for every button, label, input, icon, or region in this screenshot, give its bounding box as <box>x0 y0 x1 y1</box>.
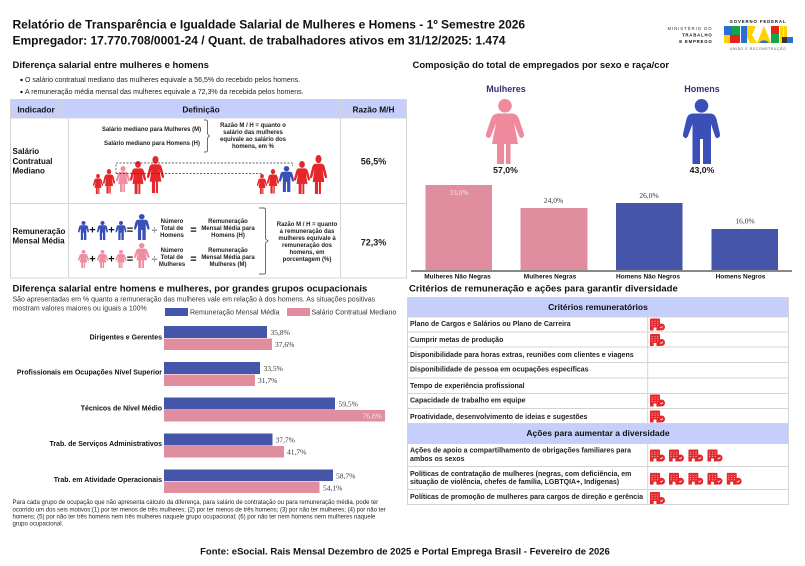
bar chart: sexo e raça/cor: Mulheres Não Negras <box>424 274 491 280</box>
icons: criteria <box>650 318 665 422</box>
bars: atividade operacionais: 54,1% <box>323 484 342 492</box>
formula: homens: ÷ <box>151 224 158 236</box>
logo: ministério do trabalho e emprego: MINISTÉRIO DO <box>667 26 712 31</box>
bullet text block: A remuneração média mensal das mulheres equivale a 72,3% da recebida pelos homens. <box>25 89 304 96</box>
definition: salário mediano: homens, em % <box>232 144 275 150</box>
icons: actions <box>650 450 742 504</box>
formula: mulheres <box>78 243 255 268</box>
header: critérios remuneratórios <box>408 298 788 317</box>
bars: atividade operacionais <box>54 470 355 493</box>
definition: razão remuneração: homens, em <box>289 250 325 256</box>
indicator: salário contratual mediano <box>12 147 52 176</box>
footnote: homens; (5) por não ter três homens nem três mulheres naquele grupo ocupacional; (6) por não ter nem homens nem mulheres naquele <box>12 514 376 520</box>
icon: mulheres 57,0%: 57,0% <box>493 165 518 175</box>
logo: ministério do trabalho e emprego: E EMPREGO <box>679 39 712 44</box>
criteria list: Plano de Cargos e Salários ou Plano de Carreira <box>410 321 571 328</box>
definition: salário mediano: equivale ao salário dos <box>220 137 287 143</box>
definition: razão remuneração: Razão M / H = quanto <box>277 222 338 228</box>
panel: critérios e ações <box>408 298 788 504</box>
bar chart: sexo e raça/cor: 24,0% <box>544 196 563 205</box>
bar chart: sexo e raça/cor <box>411 185 792 280</box>
criteria list: Proatividade, desenvolvimento de ideias e sugestões <box>410 414 588 421</box>
icon: mulheres 57,0%: Mulheres <box>486 84 526 94</box>
bar chart: sexo e raça/cor: Homens Não Negros <box>616 274 680 280</box>
logo: ministério do trabalho e emprego: TRABALHO <box>682 32 712 37</box>
formula: homens: = <box>127 224 133 236</box>
criteria list <box>410 321 634 421</box>
footnote: Para cada grupo de ocupação que não apresenta cálculo da diferença, para salário de contratação ou para remuneração média, pode ter <box>12 500 378 506</box>
criteria list: Tempo de experiência profissional <box>410 383 525 390</box>
indicator: remuneração mensal média: Mensal Média <box>12 236 65 246</box>
actions list: Ações de apoio a compartilhamento de obrigações familiares para <box>410 448 631 454</box>
legend: Salário Contratual Mediano <box>312 310 396 316</box>
title <box>12 17 525 47</box>
bars: técnicos: 76,8% <box>363 412 382 420</box>
subtitle text <box>12 296 376 312</box>
bars: profissionais: Profissionais em Ocupações Nível Superior <box>17 370 162 376</box>
header: ações para aumentar a diversidade <box>408 424 788 444</box>
formula: mulheres: + <box>108 254 115 266</box>
formula: mulheres: Total de <box>161 255 184 261</box>
bars: serviços administrativos: Trab. de Serviços Administrativos <box>49 441 162 448</box>
icon: homens 43,0%: 43,0% <box>690 165 715 175</box>
formula: homens: Remuneração <box>208 219 248 225</box>
definition: razão remuneração: porcentagem (%) <box>283 257 331 263</box>
formula: homens: Total de <box>161 226 184 232</box>
formula: mulheres: + <box>89 254 96 266</box>
indicator: salário contratual mediano: Salário <box>12 147 39 156</box>
bullet text block <box>20 77 304 96</box>
value: 56,5%: 56,5% <box>361 156 386 166</box>
header: critérios remuneratórios: Critérios remuneratórios <box>548 302 648 312</box>
bullet text block: O salário contratual mediano das mulheres equivale a 56,5% do recebido pelos homens. <box>25 77 300 84</box>
formula: homens: + <box>89 224 96 236</box>
title: Relatório de Transparência e Igualdade Salarial de Mulheres e Homens - 1º Semestre 2026 <box>12 17 525 31</box>
bars: serviços administrativos: 37,7% <box>276 436 295 444</box>
bars: técnicos: Técnicos de Nível Médio <box>81 406 162 412</box>
bars: dirigentes e gerentes <box>90 326 294 350</box>
title: Empregador: 17.770.708/0001-24 / Quant. de trabalhadores ativos em 31/12/2025: 1.474 <box>12 33 506 47</box>
definition: razão remuneração <box>259 208 338 274</box>
icon: men and women group <box>257 155 327 194</box>
icon: mulheres 57,0% <box>486 84 526 175</box>
indicator: remuneração mensal média: Remuneração <box>12 227 66 236</box>
formula: mulheres: Remuneração <box>208 248 248 254</box>
subtitle text: São apresentadas em % quanto a remuneração das mulheres vale em relação à dos homens. As situações positivas <box>12 296 376 304</box>
bars: atividade operacionais: 58,7% <box>336 472 355 480</box>
logo: ministério do trabalho e emprego <box>667 26 712 44</box>
bar chart: sexo e raça/cor: 16,0% <box>735 216 755 226</box>
bars: dirigentes e gerentes: 37,6% <box>275 340 294 349</box>
actions list: Políticas de promoção de mulheres para cargos de direção e gerência <box>410 494 643 501</box>
formula: homens <box>78 214 255 240</box>
actions list: Políticas de contratação de mulheres (negras, com deficiência, em <box>410 471 631 478</box>
definition: razão remuneração: a remuneração das <box>280 229 335 235</box>
formula: homens: = <box>190 224 197 236</box>
logo: governo federal brasil <box>724 19 793 51</box>
formula: mulheres: ÷ <box>151 254 158 266</box>
formula: mulheres: = <box>127 254 133 266</box>
actions list: ambos os sexos <box>410 456 465 463</box>
formula: mulheres: = <box>190 254 197 266</box>
criteria list: Disponibilidade de pessoa em ocupações específicas <box>410 366 589 374</box>
logo: governo federal brasil: GOVERNO FEDERAL <box>730 19 786 24</box>
formula: homens: Mensal Média para <box>201 226 255 232</box>
formula: homens: Homens (H) <box>211 233 245 239</box>
formula: mulheres: Mensal Média para <box>201 255 255 261</box>
header: ações para aumentar a diversidade: Ações para aumentar a diversidade <box>526 428 670 438</box>
formula: mulheres: Mulheres (M) <box>209 262 247 268</box>
definition: salário mediano: salário das mulheres <box>223 130 284 136</box>
bars: dirigentes e gerentes: Dirigentes e Gerentes <box>90 334 162 342</box>
bars: serviços administrativos: 41,7% <box>287 448 306 456</box>
formula: mulheres: Mulheres <box>159 262 186 268</box>
bar chart: sexo e raça/cor: Mulheres Negras <box>524 274 577 280</box>
footnote: grupo ocupacional. <box>12 522 64 528</box>
bars: técnicos <box>81 398 385 422</box>
formula: mulheres: Número <box>161 248 184 254</box>
bar chart: sexo e raça/cor: 26,0% <box>639 191 659 200</box>
legend <box>165 308 396 316</box>
table header <box>10 100 406 118</box>
indicator: salário contratual mediano: Contratual <box>12 157 52 166</box>
footnote <box>12 500 386 528</box>
indicator: salário contratual mediano: Mediano <box>12 166 45 176</box>
bars: atividade operacionais: Trab. em Atividade Operacionais <box>54 477 162 484</box>
criteria list: Capacidade de trabalho em equipe <box>410 398 526 404</box>
heading: critérios de remuneração: Critérios de remuneração e ações para garantir diversidade <box>409 284 678 294</box>
heading: diferença por grupos ocupacionais: Diferença salarial entre homens e mulheres, por grandes grupos ocupacionais <box>12 284 367 294</box>
panel: tabela de indicadores <box>10 100 406 278</box>
bar chart: sexo e raça/cor: Homens Negros <box>716 274 766 280</box>
bars: técnicos: 59,5% <box>338 400 358 408</box>
bar chart: grupos ocupacionais <box>17 326 385 493</box>
source line: Fonte: eSocial. Rais Mensal Dezembro de 2025 e Portal Emprega Brasil - Fevereiro de 2026 <box>200 546 610 558</box>
icon: homens 43,0% <box>683 84 720 175</box>
heading: diferença salarial: Diferença salarial entre mulheres e homens <box>12 60 209 71</box>
definition: salário mediano <box>102 120 287 152</box>
table header: Razão M/H <box>353 104 394 114</box>
definition: salário mediano: Razão M / H = quanto o <box>220 123 286 129</box>
subtitle text: mostram valores maiores ou iguais a 100% <box>12 306 147 312</box>
criteria list: Cumprir metas de produção <box>410 337 503 344</box>
formula: homens: Número <box>161 219 184 225</box>
definition: salário mediano: Salário mediano para Mulheres (M) <box>102 127 201 133</box>
heading: composição: Composição do total de empregados por sexo e raça/cor <box>412 60 669 71</box>
formula: homens: Homens <box>160 233 184 239</box>
actions list: situação de violência, chefes de família, LGBTQIA+, Indígenas) <box>410 479 619 486</box>
definition: razão remuneração: remuneração dos <box>282 243 333 249</box>
legend: Remuneração Mensal Média <box>190 310 280 316</box>
logo: governo federal brasil: UNIÃO E RECONSTRUÇÃO <box>730 46 786 51</box>
bars: serviços administrativos <box>49 434 306 458</box>
definition: razão remuneração: mulheres equivale à <box>278 236 336 242</box>
actions list <box>410 448 643 501</box>
icon: women group <box>93 156 164 194</box>
bars: profissionais: 33,5% <box>264 364 283 373</box>
indicator: remuneração mensal média <box>12 227 66 246</box>
bars: dirigentes e gerentes: 35,8% <box>270 328 290 337</box>
bars: profissionais: 31,7% <box>258 376 277 385</box>
footnote: ocorrido um dos seis motivos:(1) por ter menos de três mulheres; (2) por ter menos de três homens; (3) por não ter mulheres; (4) por não ter <box>12 508 386 514</box>
definition: salário mediano: Salário mediano para Homens (H) <box>104 141 200 147</box>
formula: homens: + <box>108 224 115 236</box>
dashed median guide <box>116 163 292 174</box>
bars: profissionais <box>17 362 283 386</box>
icon: homens 43,0%: Homens <box>684 84 720 94</box>
table header: Indicador <box>17 104 55 114</box>
criteria list: Disponibilidade para horas extras, reuniões com clientes e viagens <box>410 352 634 359</box>
bar chart: sexo e raça/cor: 33,0% <box>449 188 469 197</box>
value: 72,3%: 72,3% <box>361 238 386 248</box>
table header: Definição <box>182 104 220 114</box>
